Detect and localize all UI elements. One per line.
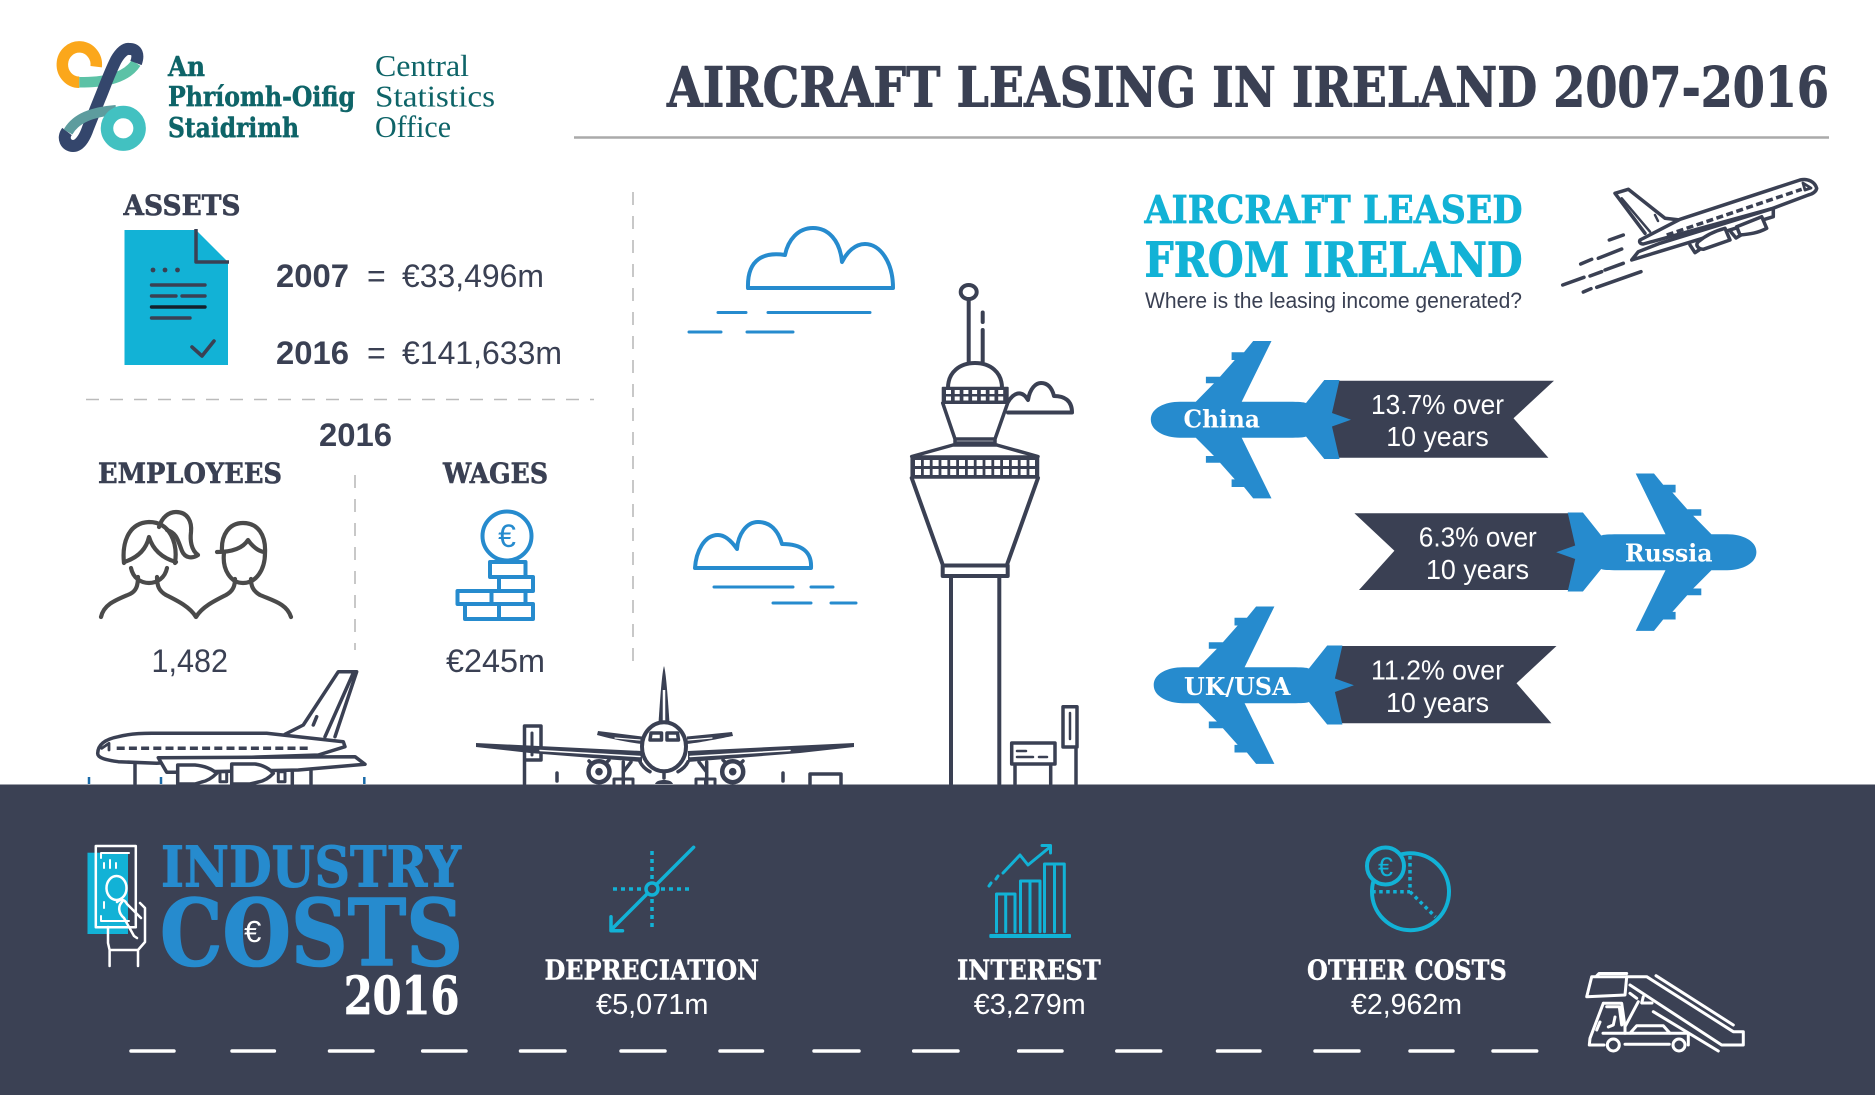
icon: parked plane side view [89, 672, 365, 784]
metric: other costs [1307, 848, 1507, 1021]
heading: employees: EMPLOYEES [98, 457, 282, 490]
value: interest: €3,279m [974, 989, 1086, 1021]
logo wordmark Irish: An [167, 52, 205, 83]
panel: Russia [1354, 474, 1756, 631]
logo wordmark English: Office [375, 109, 451, 144]
value: UK/USA: 10 years [1386, 687, 1489, 718]
heading: wages: WAGES [442, 457, 548, 490]
assets 2016 [276, 335, 562, 371]
icon: document [124, 229, 229, 365]
assets 2007: = [367, 258, 386, 294]
value: wages: €245m [446, 643, 545, 679]
heading: assets: ASSETS [123, 189, 240, 222]
logo wordmark English: Statistics [375, 78, 495, 114]
banner: UK/USA [1333, 646, 1556, 723]
logo wordmark Irish [167, 52, 355, 144]
value: depreciation: €5,071m [596, 989, 708, 1021]
value: employees: 1,482 [152, 643, 228, 679]
assets 2007: 2007 [276, 258, 349, 294]
value: Russia: 6.3% over [1419, 522, 1537, 553]
icon: depreciation [611, 847, 694, 931]
icon: airport stairs truck [1587, 974, 1743, 1051]
label: UK/USA: UK/USA [1184, 672, 1291, 701]
value: UK/USA [1371, 654, 1504, 718]
panel: employees [98, 457, 291, 679]
panel: aircraft leased heading [1144, 187, 1522, 313]
label: interest: INTEREST [957, 955, 1101, 986]
label: Russia: Russia [1625, 539, 1712, 568]
icon: interest chart [989, 846, 1071, 938]
metric: interest [957, 846, 1101, 1021]
value: China [1371, 389, 1504, 452]
icon: coin and bricks: € [498, 518, 516, 554]
value: Russia: 10 years [1426, 554, 1529, 585]
icon: coin and bricks [458, 512, 533, 619]
CSO logo [62, 47, 495, 146]
icon: cloud top [689, 228, 893, 332]
icon: logo knot [62, 47, 140, 146]
logo wordmark Irish: Phríomh-Oifig [168, 82, 355, 113]
logo wordmark English: Central [375, 48, 469, 83]
assets 2007 [276, 258, 544, 294]
icon: plane Russia [1556, 474, 1756, 631]
icon: phone in hand [88, 846, 145, 966]
value: other costs: €2,962m [1351, 989, 1462, 1021]
value: China: 13.7% over [1371, 389, 1504, 420]
label: China: China [1184, 405, 1260, 434]
icon: plane China [1151, 341, 1351, 498]
heading: industry: INDUSTRY [161, 835, 462, 901]
logo wordmark Irish: Staidrimh [168, 113, 299, 144]
panel: wages [442, 457, 548, 679]
assets 2016: 2016 [276, 335, 349, 371]
year heading 2016: 2016 [319, 417, 392, 453]
subheading: Where is the leasing income generated? [1145, 288, 1522, 313]
icon: plane taking off [1563, 179, 1817, 292]
banner: China [1330, 381, 1554, 458]
icon: pie and coin: € [1378, 852, 1393, 882]
year 2016: 2016 [344, 966, 459, 1027]
heading: from ireland: FROM IRELAND [1144, 233, 1522, 289]
panel: assets [123, 189, 562, 371]
value: UK/USA: 11.2% over [1371, 654, 1504, 685]
assets 2007: €33,496m [402, 258, 544, 294]
icon: parked plane front view [476, 666, 854, 784]
banner: Russia [1354, 513, 1577, 590]
heading: costs: COSTS [160, 879, 463, 987]
label: other costs: OTHER COSTS [1307, 955, 1507, 986]
metric: depreciation [544, 847, 759, 1021]
assets 2016: = [367, 335, 386, 371]
heading: aircraft leased: AIRCRAFT LEASED [1144, 187, 1522, 232]
logo wordmark English [375, 48, 495, 144]
icon: cloud lower [695, 522, 856, 603]
icon: euro in O: € [244, 914, 261, 949]
icon: control tower [912, 285, 1077, 784]
icon: two people [101, 512, 291, 617]
panel: UK/USA [1154, 606, 1556, 764]
icon: pie and coin [1367, 848, 1449, 930]
panel: industry costs band [0, 784, 1875, 1095]
icon: plane UK/USA [1154, 606, 1354, 764]
value: China: 10 years [1386, 421, 1489, 452]
assets 2016: €141,633m [402, 335, 562, 371]
label: depreciation: DEPRECIATION [544, 955, 759, 986]
panel: China [1151, 341, 1554, 498]
value: Russia [1419, 522, 1537, 585]
